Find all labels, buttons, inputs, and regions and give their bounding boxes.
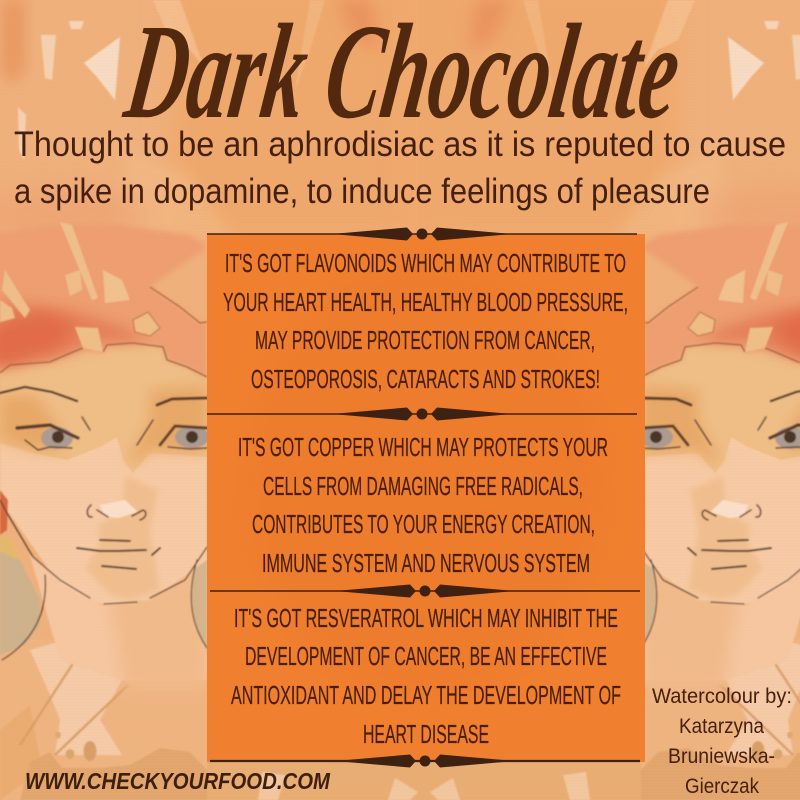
copper text: CELLS FROM DAMAGING FREE RADICALS, bbox=[263, 471, 583, 501]
flavonoids text bbox=[223, 248, 628, 394]
divider ornament bottom bbox=[210, 754, 640, 768]
watercolour credit: Bruniewska- bbox=[668, 745, 775, 768]
forehead wash bbox=[0, 328, 207, 473]
jaw bbox=[0, 500, 207, 660]
divider ornament second bbox=[207, 408, 637, 420]
panel: health benefits bbox=[207, 228, 645, 768]
nose bbox=[82, 417, 153, 520]
right brow and eye bbox=[157, 398, 209, 449]
lower face bbox=[0, 435, 207, 604]
website url: WWW.CHECKYOURFOOD.COM bbox=[25, 768, 331, 794]
left brow and eye bbox=[0, 387, 78, 450]
watercolour credit bbox=[652, 685, 792, 798]
subtitle bbox=[14, 125, 786, 211]
copper text bbox=[238, 432, 608, 578]
divider ornament third bbox=[210, 584, 640, 598]
resveratrol text bbox=[231, 603, 621, 749]
right mirrored watercolour portrait bbox=[398, 0, 800, 800]
lower washes and drips bbox=[0, 640, 207, 800]
resveratrol text: HEART DISEASE bbox=[363, 719, 489, 749]
watercolour credit: Katarzyna bbox=[679, 715, 764, 738]
neck and shoulder bbox=[30, 555, 207, 680]
lips bbox=[77, 540, 160, 569]
hair wash bbox=[0, 225, 207, 380]
subtitle: a spike in dopamine, to induce feelings of pleasure bbox=[14, 172, 710, 211]
watercolour credit: Watercolour by: bbox=[652, 685, 792, 708]
left watercolour portrait bbox=[0, 0, 450, 800]
copper text: IMMUNE SYSTEM AND NERVOUS SYSTEM bbox=[262, 548, 590, 578]
divider ornament top bbox=[207, 228, 637, 240]
facial linework bbox=[0, 387, 209, 660]
watercolour credit: Gierczak bbox=[685, 775, 759, 798]
